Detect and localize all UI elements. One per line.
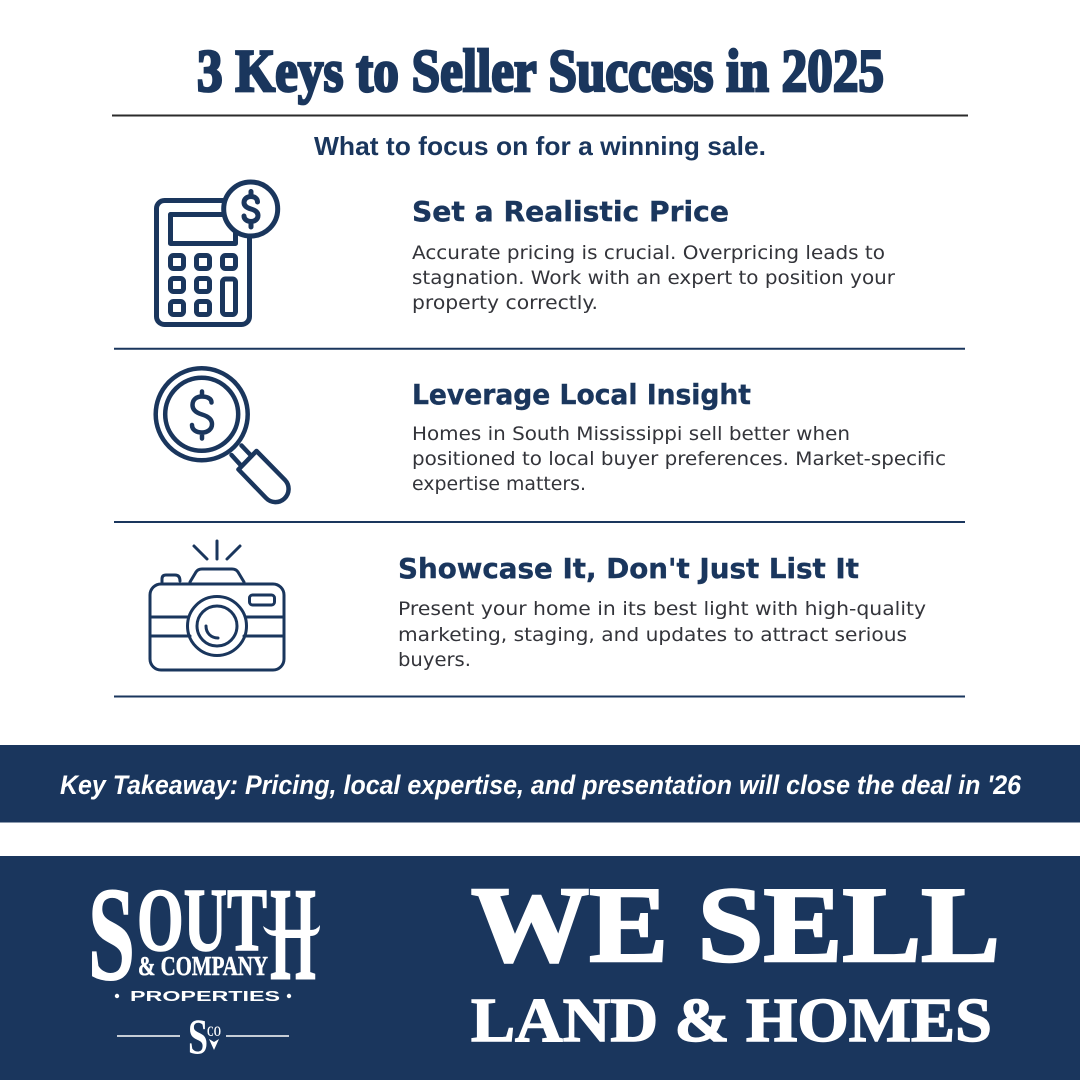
heading: showcase it: Showcase It, Don't Just List It: [398, 552, 859, 585]
logo: South & Company Properties: S: [88, 860, 135, 1008]
heading: leverage local insight: Leverage Local Insight: [412, 378, 751, 411]
banner: key takeaway: Key Takeaway: Pricing, local expertise, and presentation will close the deal in '26: [60, 770, 1022, 800]
logo: South & Company Properties: OUT: [137, 871, 267, 970]
logo: South & Company Properties: [88, 860, 320, 1064]
heading: set a realistic price: Set a Realistic Price: [412, 195, 729, 228]
slogan: land & homes: LAND & HOMES: [471, 986, 992, 1055]
text: showcase description: Present your home in its best light with high-quality: [398, 598, 926, 620]
panel: showcase it: [150, 541, 926, 671]
footer panel: H: [270, 860, 316, 1008]
text: local insight description: Homes in South Mississippi sell better when: [412, 423, 850, 445]
logo: South & Company Properties: & COMPANY: [138, 951, 268, 981]
text: showcase description: marketing, staging, and updates to attract serious: [398, 624, 907, 646]
icon: calculator with dollar coin: [156, 182, 278, 324]
icon: camera with flash: [150, 541, 284, 670]
text: pricing description: stagnation. Work with an expert to position your: [412, 267, 895, 289]
text: showcase description: [398, 598, 926, 671]
icon: magnifying glass with dollar: [156, 368, 289, 502]
footer panel: [0, 856, 1080, 1080]
slogan: we sell: WE SELL: [471, 866, 1000, 985]
logo: South & Company Properties: CO: [207, 1024, 221, 1040]
text: pricing description: Accurate pricing is crucial. Overpricing leads to: [412, 242, 885, 264]
text: local insight description: expertise matters.: [412, 473, 586, 495]
text: pricing description: [412, 242, 895, 314]
text: local insight description: [412, 423, 946, 495]
subtitle: What to focus on for a winning sale.: [314, 131, 766, 161]
panel: leverage local insight: [156, 368, 946, 502]
text: pricing description: property correctly.: [412, 292, 598, 314]
logo: South & Company Properties: S: [188, 1008, 208, 1064]
text: local insight description: positioned to local buyer preferences. Market-specific: [412, 448, 946, 470]
text: showcase description: buyers.: [398, 649, 471, 671]
title: 3 Keys to Seller Success in 2025: [197, 38, 884, 104]
logo: South & Company Properties: PROPERTIES: [130, 988, 280, 1005]
panel: set a realistic price: [156, 182, 895, 324]
banner: key takeaway: [0, 745, 1080, 822]
